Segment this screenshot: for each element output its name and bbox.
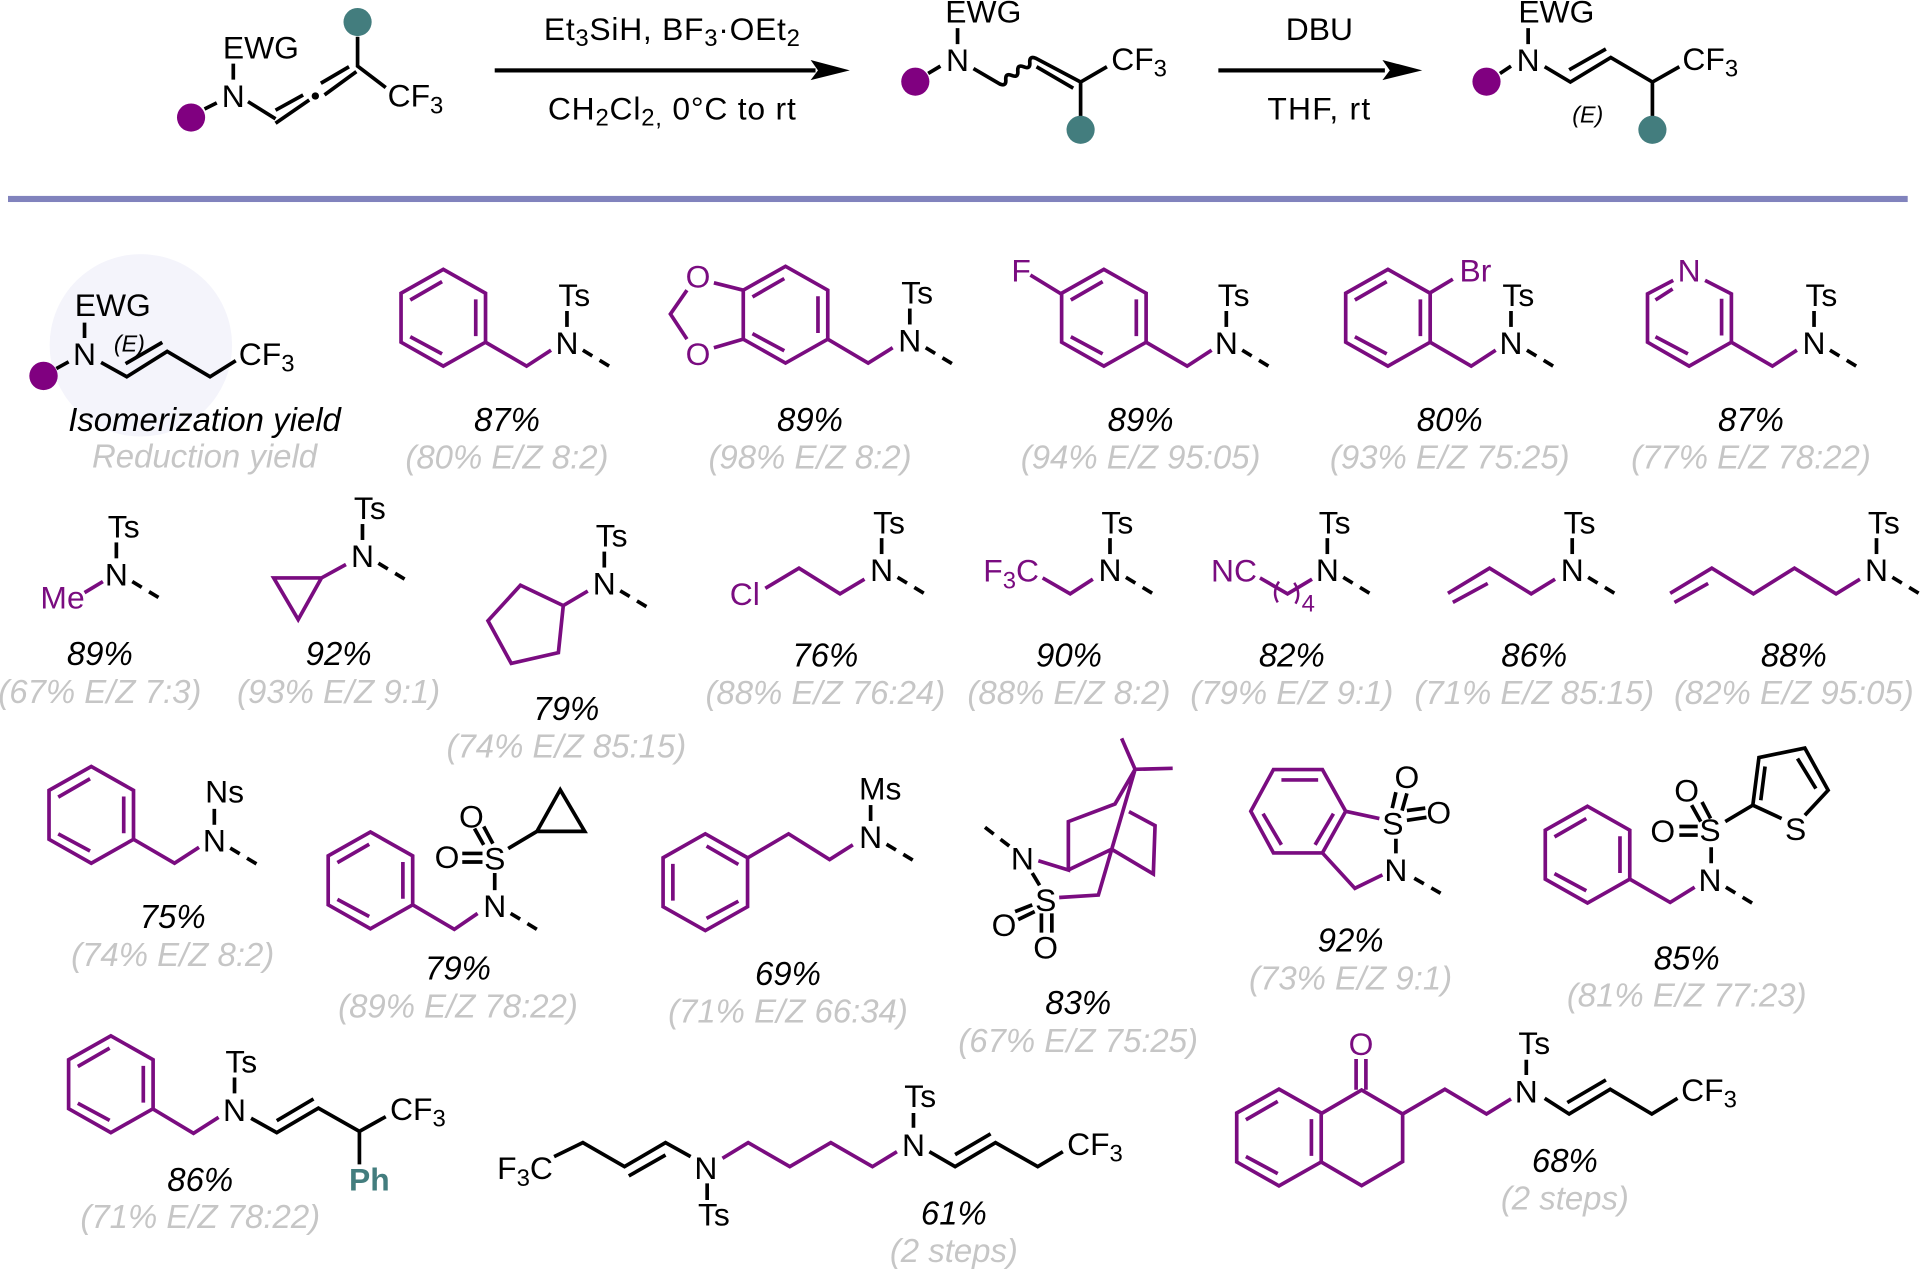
compound: thienylsulfonyl benzyl: (81% E/Z 77:23) xyxy=(1567,976,1807,1013)
compound: trifluoroethyl: 90% xyxy=(1036,637,1102,674)
compound: bis-enamide: F xyxy=(497,1150,517,1186)
compound: benzodioxole: O xyxy=(686,336,710,372)
compound: bis-enamide: (2 steps) xyxy=(890,1232,1018,1269)
compound: tetralone: 3 xyxy=(1724,1086,1737,1113)
compound: allyl xyxy=(1414,504,1654,711)
compound: cyclopropyl: N xyxy=(351,538,374,574)
compound: chloroethyl: Cl xyxy=(730,576,760,612)
compound: 3-pyridylmethyl: (77% E/Z 78:22) xyxy=(1631,438,1871,475)
compound: allyl: N xyxy=(1561,552,1584,588)
compound: saccharin-type sultam: O xyxy=(1426,794,1451,830)
compound: Ms phenethyl: Ms xyxy=(859,771,901,807)
compound: 4-fluorobenzyl: (94% E/Z 95:05) xyxy=(1021,438,1260,475)
reagents: reduction step: 2, xyxy=(641,105,663,132)
structure: E product: N xyxy=(1517,42,1540,78)
compound: tetralone: O xyxy=(1349,1026,1373,1062)
compound: saccharin-type sultam: (73% E/Z 9:1) xyxy=(1249,959,1452,996)
compound: tetralone: CF xyxy=(1681,1072,1724,1108)
compound: thienylsulfonyl benzyl: S xyxy=(1699,812,1721,848)
compound: thienylsulfonyl benzyl: O xyxy=(1650,813,1675,849)
compound: cyclopentyl: 79% xyxy=(533,690,599,727)
compound: phenyl-substituted product: 3 xyxy=(432,1106,446,1133)
structure: general product: CF xyxy=(239,336,281,372)
structure: reduced intermediate: CF xyxy=(1111,41,1154,77)
compound: 2-bromobenzyl: Br xyxy=(1460,253,1492,289)
compound: trifluoroethyl: 3 xyxy=(1003,567,1016,594)
compound: cyclopropylsulfonyl benzyl xyxy=(328,790,585,1025)
compound: bis-enamide: N xyxy=(694,1150,717,1186)
compound: cyclopropylsulfonyl benzyl: O xyxy=(435,839,459,875)
reagents: isomerization step xyxy=(1267,11,1371,126)
compound: 3-pyridylmethyl xyxy=(1631,253,1871,475)
compound: phenyl-substituted product: 86% xyxy=(167,1161,233,1198)
compound: bis-enamide xyxy=(497,1078,1123,1269)
structure: general product: (E) xyxy=(114,330,145,356)
compound: bis-enamide: N xyxy=(902,1127,925,1163)
reagents: isomerization step: DBU xyxy=(1286,11,1353,47)
compound: allyl: 86% xyxy=(1501,637,1567,674)
compound: cyclopropyl xyxy=(237,490,440,710)
structure: allene starting material: CF xyxy=(388,78,430,114)
compound: bis-enamide: 61% xyxy=(921,1194,987,1231)
structure: general product: N xyxy=(73,336,96,372)
compound: phenyl-substituted product: CF xyxy=(390,1091,432,1127)
compound: benzodioxole xyxy=(670,259,952,475)
compound: saccharin-type sultam: O xyxy=(1395,759,1419,795)
compound: saccharin-type sultam: N xyxy=(1384,852,1407,888)
reagents: reduction step: 2 xyxy=(595,105,610,132)
compound: chloroethyl: N xyxy=(870,552,893,588)
reagents: reduction step: Cl xyxy=(610,90,641,126)
compound: pentenyl: Ts xyxy=(1868,504,1900,540)
compound: tetralone: (2 steps) xyxy=(1501,1180,1629,1217)
compound: methyl: Ts xyxy=(108,509,140,545)
compound: cyclopropylsulfonyl benzyl: (89% E/Z 78:22) xyxy=(338,988,578,1025)
compound: camphor sultam: 83% xyxy=(1045,984,1111,1021)
compound: cyclopropylsulfonyl benzyl: N xyxy=(483,888,506,924)
structure: reduced intermediate: 3 xyxy=(1154,56,1167,83)
divider xyxy=(8,196,1908,202)
compound: Ms phenethyl xyxy=(663,771,913,1029)
compound: cyclopentyl: Ts xyxy=(596,518,628,554)
compound: 4-fluorobenzyl: Ts xyxy=(1218,277,1250,313)
compound: tetralone: Ts xyxy=(1518,1025,1550,1061)
structure: reduced intermediate xyxy=(901,0,1167,144)
arrow: isomerization step xyxy=(1218,60,1422,80)
compound: benzyl: 87% xyxy=(474,401,540,438)
compound: pentenyl: (82% E/Z 95:05) xyxy=(1674,674,1914,711)
compound: Ns benzyl: 75% xyxy=(140,898,206,935)
compound: chloroethyl: 76% xyxy=(792,637,858,674)
compound: bis-enamide: Ts xyxy=(904,1078,936,1114)
compound: Ns benzyl: (74% E/Z 8:2) xyxy=(71,936,274,973)
reagents: reduction step: SiH, BF xyxy=(589,11,704,47)
compound: benzodioxole: O xyxy=(686,259,710,295)
compound: thienylsulfonyl benzyl: O xyxy=(1674,772,1699,808)
structure: reduced intermediate: N xyxy=(946,42,969,78)
compound: bis-enamide: C xyxy=(530,1150,553,1186)
compound: benzyl: Ts xyxy=(558,277,590,313)
compound: benzyl xyxy=(401,269,609,475)
compound: tetralone xyxy=(1237,1025,1737,1217)
compound: bis-enamide: Ts xyxy=(698,1197,730,1233)
compound: cyclopentyl xyxy=(446,518,686,764)
compound: 2-bromobenzyl: Ts xyxy=(1502,277,1534,313)
compound: cyanobutyl: N xyxy=(1316,552,1339,588)
compound: camphor sultam: S xyxy=(1035,882,1056,918)
compound: Ns benzyl: Ns xyxy=(205,774,244,810)
compound: camphor sultam: O xyxy=(992,907,1016,943)
compound: trifluoroethyl: Ts xyxy=(1101,504,1133,540)
structure: E product xyxy=(1472,0,1738,144)
compound: phenyl-substituted product: (71% E/Z 78:22) xyxy=(80,1198,320,1235)
compound: cyclopropyl: (93% E/Z 9:1) xyxy=(237,673,440,710)
structure: allene starting material: 3 xyxy=(430,92,443,119)
compound: pentenyl xyxy=(1670,504,1919,711)
compound: bis-enamide: CF xyxy=(1067,1126,1110,1162)
reagents: isomerization step: THF, rt xyxy=(1267,90,1371,126)
compound: cyanobutyl xyxy=(1190,504,1393,711)
compound: Ms phenethyl: (71% E/Z 66:34) xyxy=(668,992,908,1029)
compound: 4-fluorobenzyl xyxy=(1011,253,1269,475)
compound: cyclopentyl: N xyxy=(593,565,616,601)
compound: thienylsulfonyl benzyl: 85% xyxy=(1654,939,1720,976)
legend labels xyxy=(68,401,343,475)
compound: methyl: Me xyxy=(40,580,85,616)
compound: methyl: N xyxy=(105,556,128,592)
highlight circle xyxy=(50,254,232,437)
compound: methyl xyxy=(0,509,201,710)
compound: 2-bromobenzyl: (93% E/Z 75:25) xyxy=(1330,438,1570,475)
compound: 2-bromobenzyl xyxy=(1330,253,1570,475)
compound: saccharin-type sultam: S xyxy=(1382,805,1403,841)
compound: cyclopropylsulfonyl benzyl: S xyxy=(484,840,505,876)
reagents: reduction step: 0°C to rt xyxy=(663,90,797,126)
reagents: reduction step xyxy=(544,11,801,132)
compound: phenyl-substituted product xyxy=(69,1036,446,1235)
compound: pentenyl: N xyxy=(1865,552,1888,588)
compound: 3-pyridylmethyl: 87% xyxy=(1718,401,1784,438)
compound: allyl: (71% E/Z 85:15) xyxy=(1414,674,1654,711)
compound: chloroethyl: Ts xyxy=(873,504,905,540)
compound: trifluoroethyl: C xyxy=(1016,553,1039,589)
compound: 2-bromobenzyl: 80% xyxy=(1417,401,1483,438)
compound: 4-fluorobenzyl: F xyxy=(1011,253,1031,289)
compound: camphor sultam: O xyxy=(1033,930,1058,966)
compound: 3-pyridylmethyl: N xyxy=(1803,325,1826,361)
compound: benzodioxole: N xyxy=(898,322,921,358)
compound: thienylsulfonyl benzyl: N xyxy=(1698,862,1721,898)
panel: legend compound xyxy=(29,254,343,475)
compound: cyanobutyl: NC xyxy=(1211,553,1257,589)
compound: 4-fluorobenzyl: 89% xyxy=(1108,401,1174,438)
compound: trifluoroethyl: F xyxy=(983,553,1003,589)
structure: general product: EWG xyxy=(75,287,151,323)
structure: allene starting material: N xyxy=(222,78,245,114)
compound: cyanobutyl: 4 xyxy=(1302,591,1315,618)
arrow: reduction step xyxy=(495,60,850,80)
compound: tetralone: N xyxy=(1515,1074,1538,1110)
reaction scheme header xyxy=(177,0,1738,144)
compound: pentenyl: 88% xyxy=(1761,637,1827,674)
compound: trifluoroethyl: (88% E/Z 8:2) xyxy=(967,674,1171,711)
legend labels: Reduction yield xyxy=(92,438,319,475)
compound: 3-pyridylmethyl: Ts xyxy=(1805,277,1837,313)
compound: cyclopropylsulfonyl benzyl: 79% xyxy=(425,950,491,987)
legend labels: Isomerization yield xyxy=(68,401,343,438)
reagents: reduction step: CH xyxy=(548,90,595,126)
reagents: reduction step: Et xyxy=(544,11,575,47)
compound: benzodioxole: Ts xyxy=(901,275,933,311)
reagents: reduction step: 3 xyxy=(575,25,589,52)
compound: chloroethyl xyxy=(705,504,945,711)
compound: cyclopropylsulfonyl benzyl: O xyxy=(459,799,484,835)
structure: E product: (E) xyxy=(1572,101,1603,127)
structure: allene starting material: EWG xyxy=(223,29,299,65)
compound: thienylsulfonyl benzyl xyxy=(1545,748,1828,1013)
compound: cyclopentyl: (74% E/Z 85:15) xyxy=(446,727,686,764)
compound: benzyl: (80% E/Z 8:2) xyxy=(405,438,609,475)
compound: cyclopropyl: Ts xyxy=(354,490,386,526)
compound: benzodioxole: (98% E/Z 8:2) xyxy=(708,438,912,475)
reagents: reduction step: 2 xyxy=(787,25,801,52)
reagents: reduction step: 3 xyxy=(704,25,718,52)
compound: allyl: Ts xyxy=(1564,504,1595,540)
compound: Ns benzyl xyxy=(49,766,274,973)
compound: phenyl-substituted product: Ph xyxy=(349,1162,390,1198)
compound: camphor sultam: (67% E/Z 75:25) xyxy=(958,1022,1198,1059)
compound: trifluoroethyl xyxy=(967,504,1171,711)
compound: thienylsulfonyl benzyl: S xyxy=(1785,811,1806,847)
reagents: reduction step: ·OEt xyxy=(718,11,787,47)
compound: chloroethyl: (88% E/Z 76:24) xyxy=(705,674,945,711)
compound: methyl: (67% E/Z 7:3) xyxy=(0,673,201,710)
compound: saccharin-type sultam xyxy=(1249,759,1452,996)
compound: phenyl-substituted product: N xyxy=(223,1092,246,1128)
structure: allene starting material xyxy=(177,8,443,132)
structure: E product: CF xyxy=(1682,41,1725,77)
compound: Ms phenethyl: 69% xyxy=(755,955,821,992)
compound: benzyl: N xyxy=(555,325,578,361)
compound: Ns benzyl: N xyxy=(203,823,226,859)
compound: cyanobutyl: (79% E/Z 9:1) xyxy=(1190,674,1393,711)
compound: cyclopropyl: 92% xyxy=(306,635,372,672)
compound: bis-enamide: 3 xyxy=(1110,1141,1123,1168)
compound: tetralone: 68% xyxy=(1532,1142,1598,1179)
compound: phenyl-substituted product: Ts xyxy=(225,1044,257,1080)
compound: 4-fluorobenzyl: N xyxy=(1215,325,1238,361)
compound: camphor sultam xyxy=(958,738,1198,1059)
compound: methyl: 89% xyxy=(67,635,133,672)
structure: general product: 3 xyxy=(281,351,295,378)
compound: benzodioxole: 89% xyxy=(777,401,843,438)
compound: cyanobutyl: 82% xyxy=(1259,637,1325,674)
structure: E product: 3 xyxy=(1725,56,1738,83)
structure: general product xyxy=(29,287,295,390)
compound: 3-pyridylmethyl: N xyxy=(1678,253,1701,289)
compound: bis-enamide: 3 xyxy=(517,1165,530,1192)
compound: Ms phenethyl: N xyxy=(859,819,882,855)
compound: saccharin-type sultam: 92% xyxy=(1318,921,1384,958)
compound: trifluoroethyl: N xyxy=(1098,552,1121,588)
compound: cyanobutyl: Ts xyxy=(1319,504,1351,540)
compound: 2-bromobenzyl: N xyxy=(1499,325,1522,361)
compound: camphor sultam: N xyxy=(1011,840,1034,876)
